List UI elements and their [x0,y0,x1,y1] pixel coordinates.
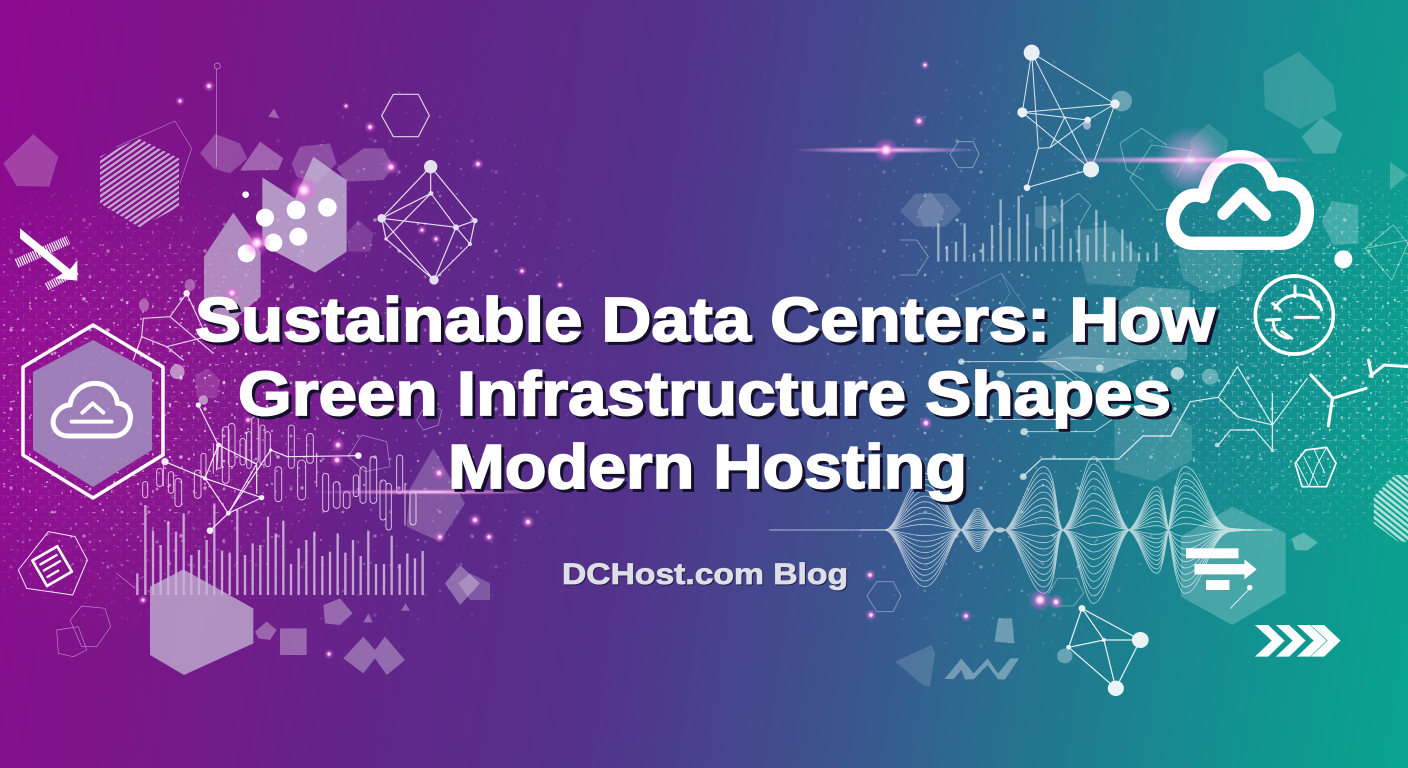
white dot [1334,250,1352,268]
arrow hexagon [1181,507,1286,625]
translucent hexagon behind wave [1114,400,1192,482]
mesh network [1017,45,1132,191]
white dots [238,191,337,262]
icon: list arrow [1186,548,1257,590]
notched hexagon [262,157,347,273]
hexagon outlines [867,578,1084,612]
icon: cloud [1173,157,1307,243]
striped hexagon right [1374,475,1408,542]
right lower shapes [867,357,1408,696]
icon: cloud upload [53,383,130,436]
arrow block [204,213,261,323]
lower muted shapes [895,618,1019,687]
cloud hexagon badge [23,325,163,498]
network over chart [161,364,362,534]
bottom network [1057,605,1149,696]
outline polygons behind title [348,403,442,472]
small outline polygons [57,573,135,657]
large hexagon [150,569,253,675]
faceted gem [1295,447,1336,487]
data texture left [0,176,374,624]
data texture right [1084,150,1408,551]
hexagon outline [382,94,429,137]
icon: gauge circle [1255,276,1333,354]
network near title [133,279,294,360]
pentagon [3,134,58,187]
title: Green Infrastructure Shapes [238,360,1171,429]
hexagon outlines [900,128,1192,275]
arrow icon [17,228,77,287]
magenta glow behind left texture [0,249,314,554]
title [195,286,1216,502]
title: Modern Hosting [448,433,967,502]
small blob [1292,533,1318,551]
polyhedron network [377,160,478,285]
left upper shapes [3,63,478,360]
faint network [953,273,1025,343]
left lower shapes [18,364,490,675]
lens flares [310,126,1315,495]
right upper shapes [900,45,1408,360]
striped hexagon [100,138,179,228]
document badge [18,532,87,595]
scattered centre particles [180,60,1218,672]
circuit lines [958,359,1307,480]
thin outline polygon [117,121,192,183]
glowing particles [138,60,1064,659]
translucent kite [407,448,465,542]
candlestick outlines [143,417,416,530]
bar chart [137,503,423,595]
translucent cluster [200,108,393,252]
subtitle: DCHost.com Blog [562,558,848,591]
bar chart right [938,196,1156,262]
title: Sustainable Data Centers: How [195,286,1216,355]
chevrons [1255,625,1341,657]
lower small shapes [255,565,490,675]
waveform [769,457,1272,603]
outline star [1365,225,1408,280]
translucent hexagons [900,52,1408,360]
Y connector [1311,360,1408,426]
antenna line [214,63,220,167]
